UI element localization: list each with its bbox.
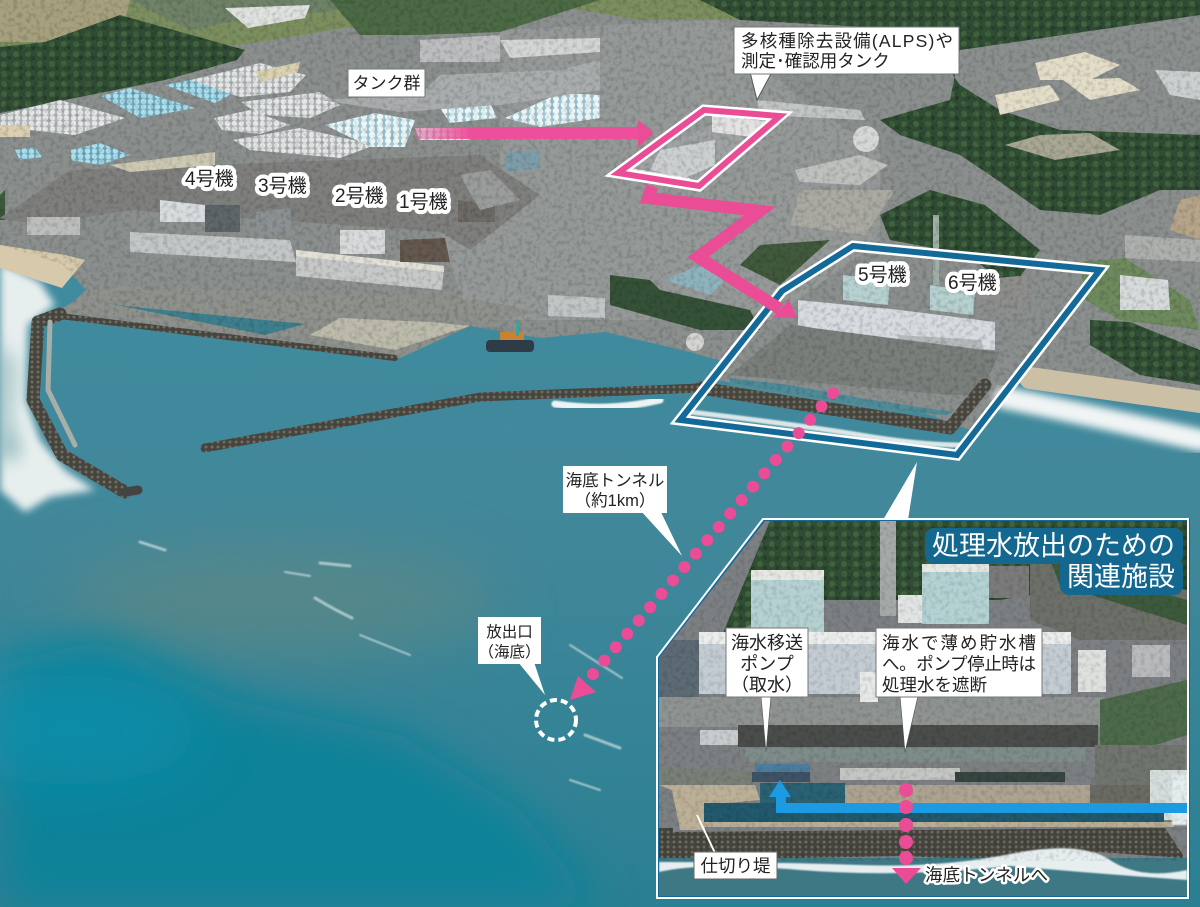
label: seawater transfer pump	[726, 628, 808, 752]
dotted arrow: undersea tunnel	[570, 393, 833, 700]
label: ALPS and tanks: 測定･確認用タンク	[741, 51, 890, 71]
label: tank group: タンク群	[352, 74, 420, 93]
label: partition embankment	[694, 815, 777, 879]
labels: units 1 to 6: 2号機	[335, 185, 384, 207]
label: ALPS and tanks: 多核種除去設備(ALPS)や	[741, 31, 953, 51]
forests and buildings east	[548, 0, 1200, 385]
tank groups	[0, 60, 600, 165]
inner basin	[102, 302, 305, 335]
intake structures	[700, 725, 1098, 782]
photo: harbor ship	[486, 322, 534, 352]
label: dilution note: 海水で薄め貯水槽	[882, 633, 1036, 653]
labels: units 1 to 6	[185, 168, 997, 294]
arrow: tank water to ALPS	[415, 120, 654, 147]
surf and sea	[659, 858, 1187, 896]
inset title	[925, 528, 1183, 595]
inset title: 関連施設	[1067, 562, 1175, 592]
label: seawater transfer pump: 海水移送	[731, 633, 803, 653]
forest west	[0, 15, 245, 113]
label: tank group	[348, 69, 425, 97]
surf streaks	[140, 542, 622, 790]
label: ALPS and tanks	[734, 27, 959, 100]
label: partition embankment: 仕切り堤	[700, 856, 771, 876]
panel: inset of related facilities	[656, 518, 1190, 899]
callout wedge to inset	[883, 462, 917, 520]
label: seawater transfer pump: （取水）	[731, 675, 803, 695]
rock breakwater	[672, 828, 1183, 860]
label: to undersea tunnel: 海底トンネルへ	[925, 865, 1048, 885]
label: dilution note	[876, 628, 1042, 752]
label: dilution note: 処理水を遮断	[882, 675, 987, 695]
label: undersea tunnel: （約1km）	[575, 491, 655, 510]
photo: western surf	[0, 262, 95, 512]
dashed circle: discharge outlet	[536, 700, 576, 740]
blue frame site: units 5 and 6	[730, 215, 1030, 415]
labels: units 1 to 6: 3号機	[258, 175, 307, 197]
labels: units 1 to 6: 1号機	[399, 191, 448, 213]
label: seawater transfer pump: ポンプ	[740, 654, 794, 674]
photo: land mass	[0, 0, 1200, 440]
label: discharge outlet: （海底）	[478, 643, 541, 661]
reactor building unit 6	[922, 564, 989, 624]
turbine buildings	[699, 632, 1071, 694]
label: undersea tunnel: 海底トンネル	[566, 471, 664, 490]
label: discharge outlet: 放出口	[486, 623, 533, 641]
photo: breakwaters	[33, 314, 1200, 492]
labels: units 1 to 6: 4号機	[185, 168, 234, 190]
photographic grain on land	[0, 0, 1200, 440]
inset title: 処理水放出のための	[932, 531, 1175, 561]
slopes behind reactors	[0, 155, 540, 250]
site apron	[60, 285, 540, 358]
pink frame: ALPS and tanks area	[618, 110, 780, 186]
industrial blocks	[665, 265, 730, 295]
blue frame: units 5 and 6 area	[680, 246, 1100, 455]
labels: units 1 to 6: 6号機	[948, 272, 997, 294]
arrow: pink route from ALPS to unit 5	[648, 186, 797, 318]
arrow: seawater intake	[781, 794, 1187, 808]
arrow: pink dotted to undersea tunnel	[892, 783, 921, 884]
ALPS area	[620, 115, 775, 190]
reactor building unit 5	[751, 570, 824, 632]
label: undersea tunnel	[563, 466, 682, 556]
reactor buildings	[27, 200, 495, 290]
labels: units 1 to 6: 5号機	[858, 264, 907, 286]
apron and water	[659, 785, 760, 830]
label: discharge outlet	[478, 617, 545, 695]
beach	[0, 245, 85, 288]
label: dilution note: へ。ポンプ停止時は	[882, 654, 1036, 674]
